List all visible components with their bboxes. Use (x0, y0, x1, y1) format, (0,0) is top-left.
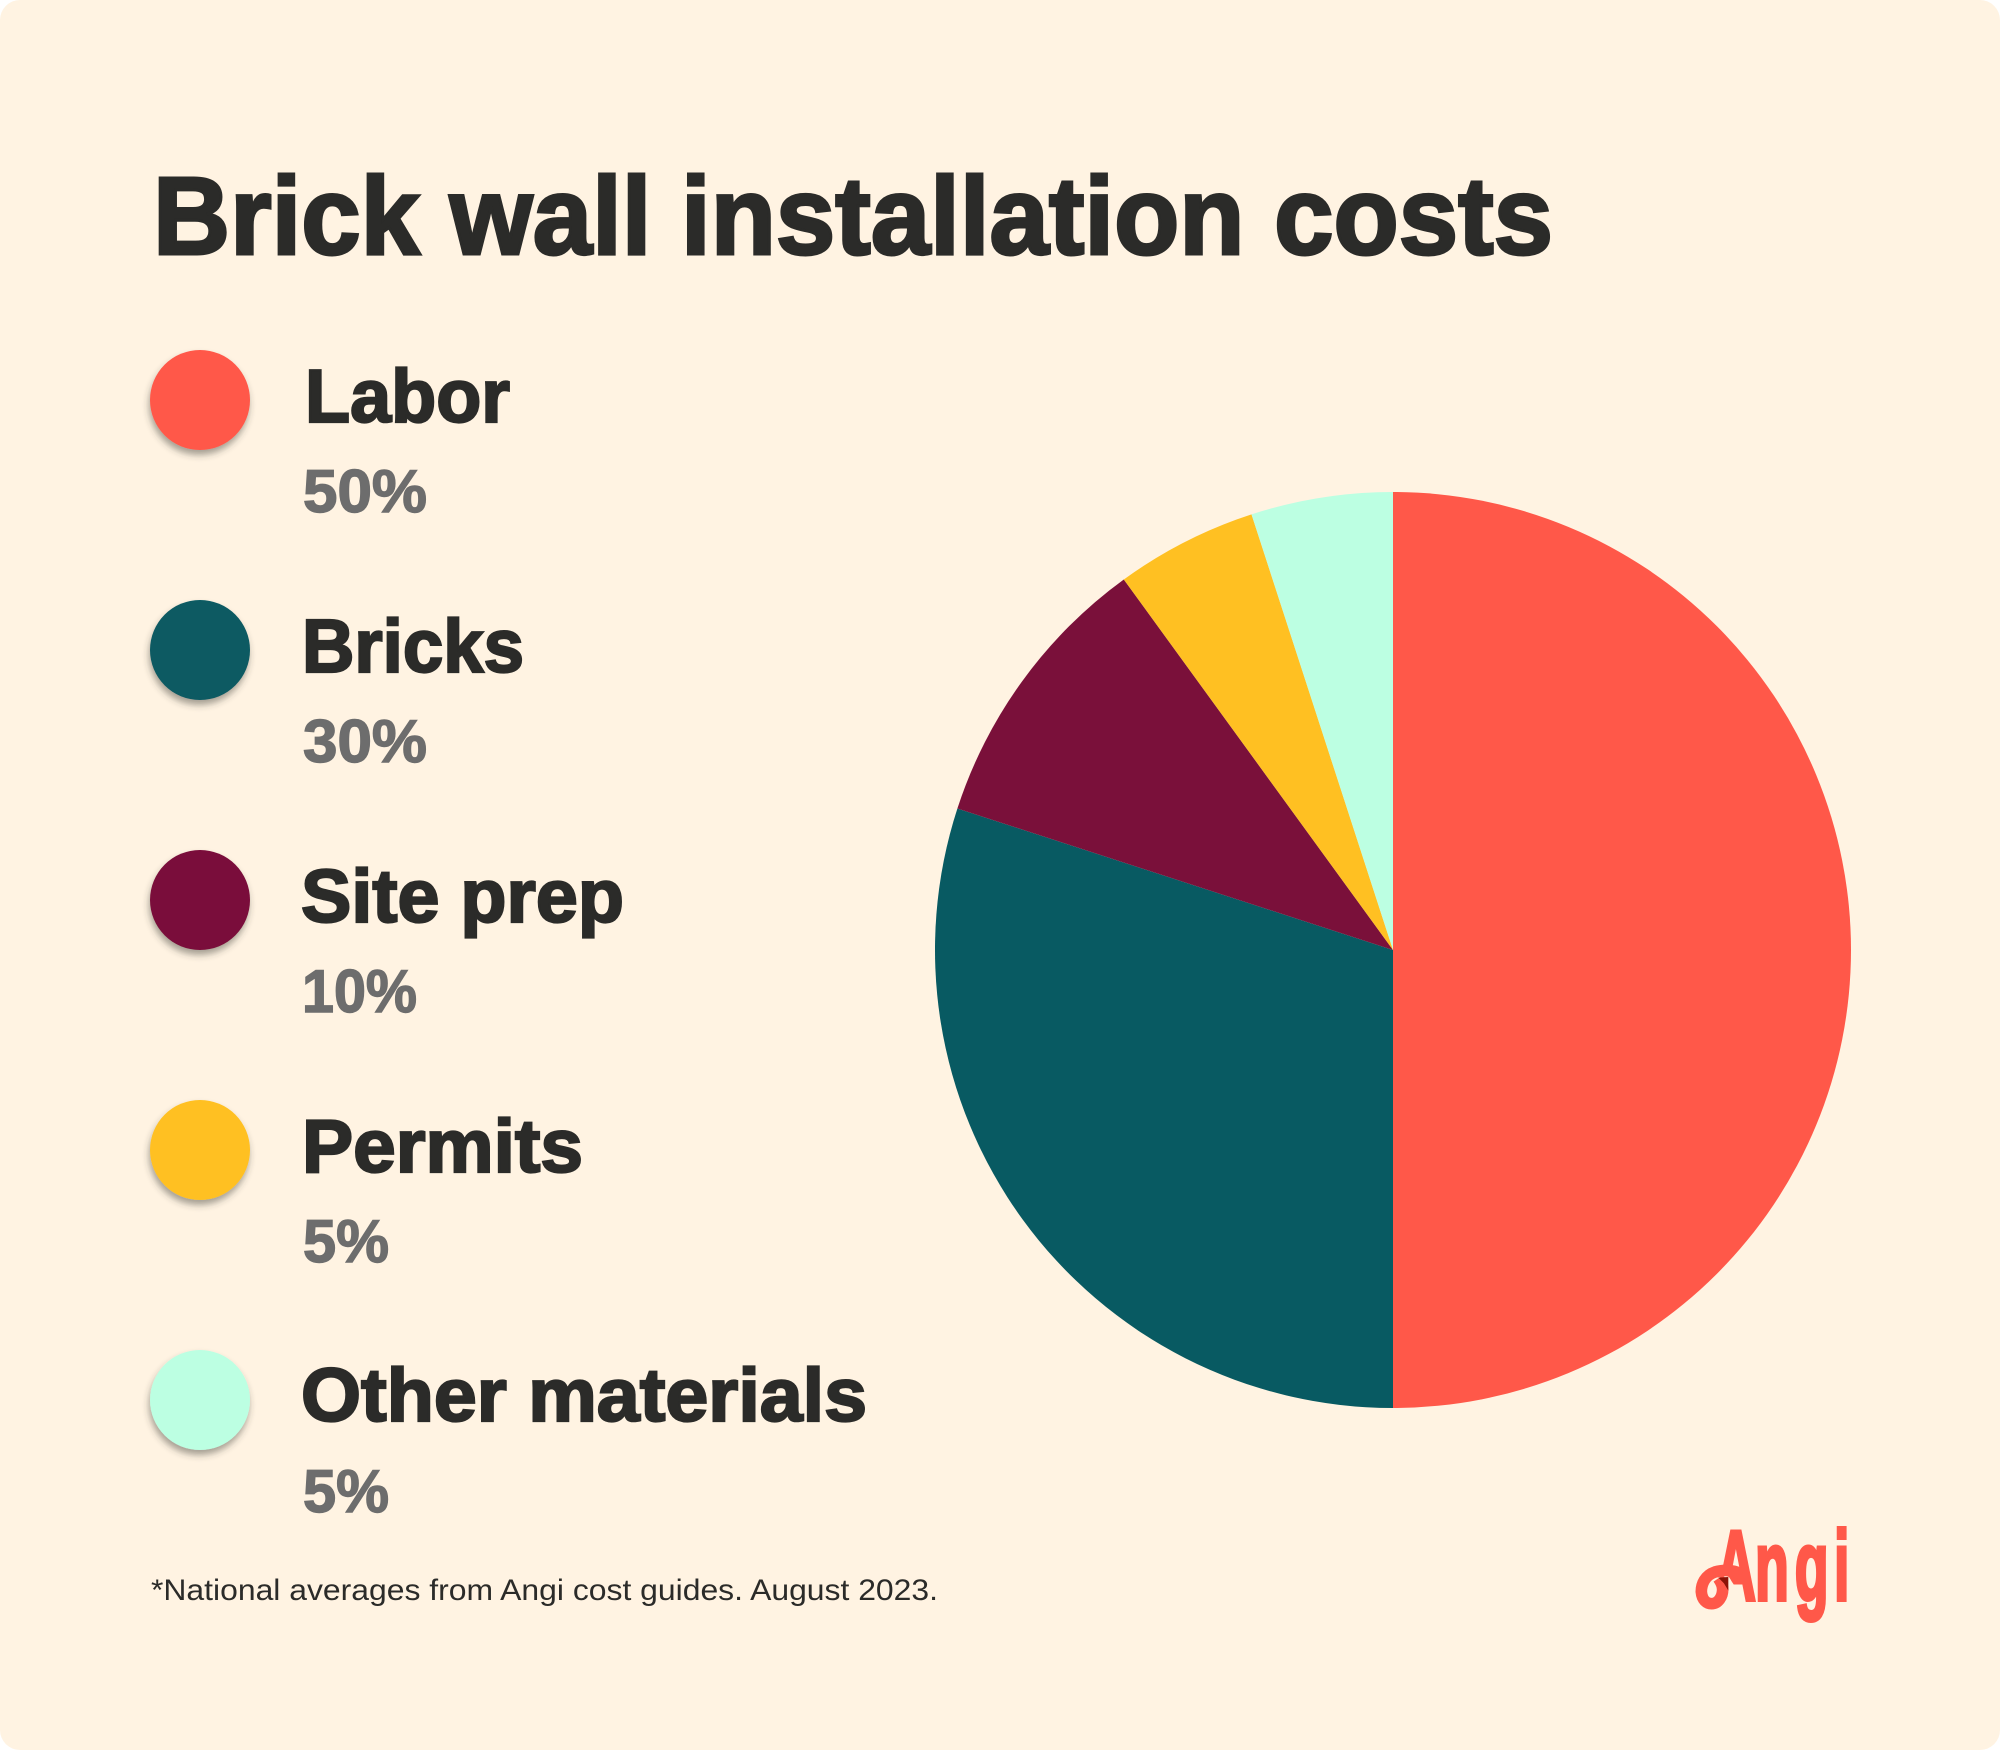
legend item: labor: 50% (303, 458, 427, 525)
slice: other materials 5% (1252, 492, 1393, 950)
legend item: site prep (150, 850, 624, 1025)
slice: bricks 30% (935, 808, 1393, 1408)
slice: labor 50% (1393, 492, 1851, 1408)
legend item: labor: Labor (305, 354, 510, 438)
legend item: permits (150, 1100, 583, 1275)
legend item: site prep: Site prep (301, 854, 624, 938)
footnote: *National averages from Angi cost guides. August 2023. (151, 1574, 938, 1607)
legend item: bricks: 30% (303, 708, 427, 775)
slice: site prep 10% (957, 580, 1393, 950)
legend item: labor (150, 350, 510, 525)
logo: Angi: Angi (1716, 1511, 1849, 1622)
slice: permits 5% (1124, 514, 1393, 950)
legend item: bricks: Bricks (302, 604, 524, 688)
legend item: other materials: 5% (303, 1458, 389, 1525)
legend item: other materials (150, 1350, 867, 1525)
legend item: permits: 5% (303, 1208, 389, 1275)
pie chart (935, 492, 1851, 1408)
title: Brick wall installation costs (153, 155, 1553, 278)
legend item: site prep: 10% (302, 958, 417, 1025)
legend (150, 350, 867, 1525)
legend item: permits: Permits (302, 1104, 583, 1188)
legend item: bricks (150, 600, 524, 775)
legend item: other materials: Other materials (301, 1353, 867, 1437)
